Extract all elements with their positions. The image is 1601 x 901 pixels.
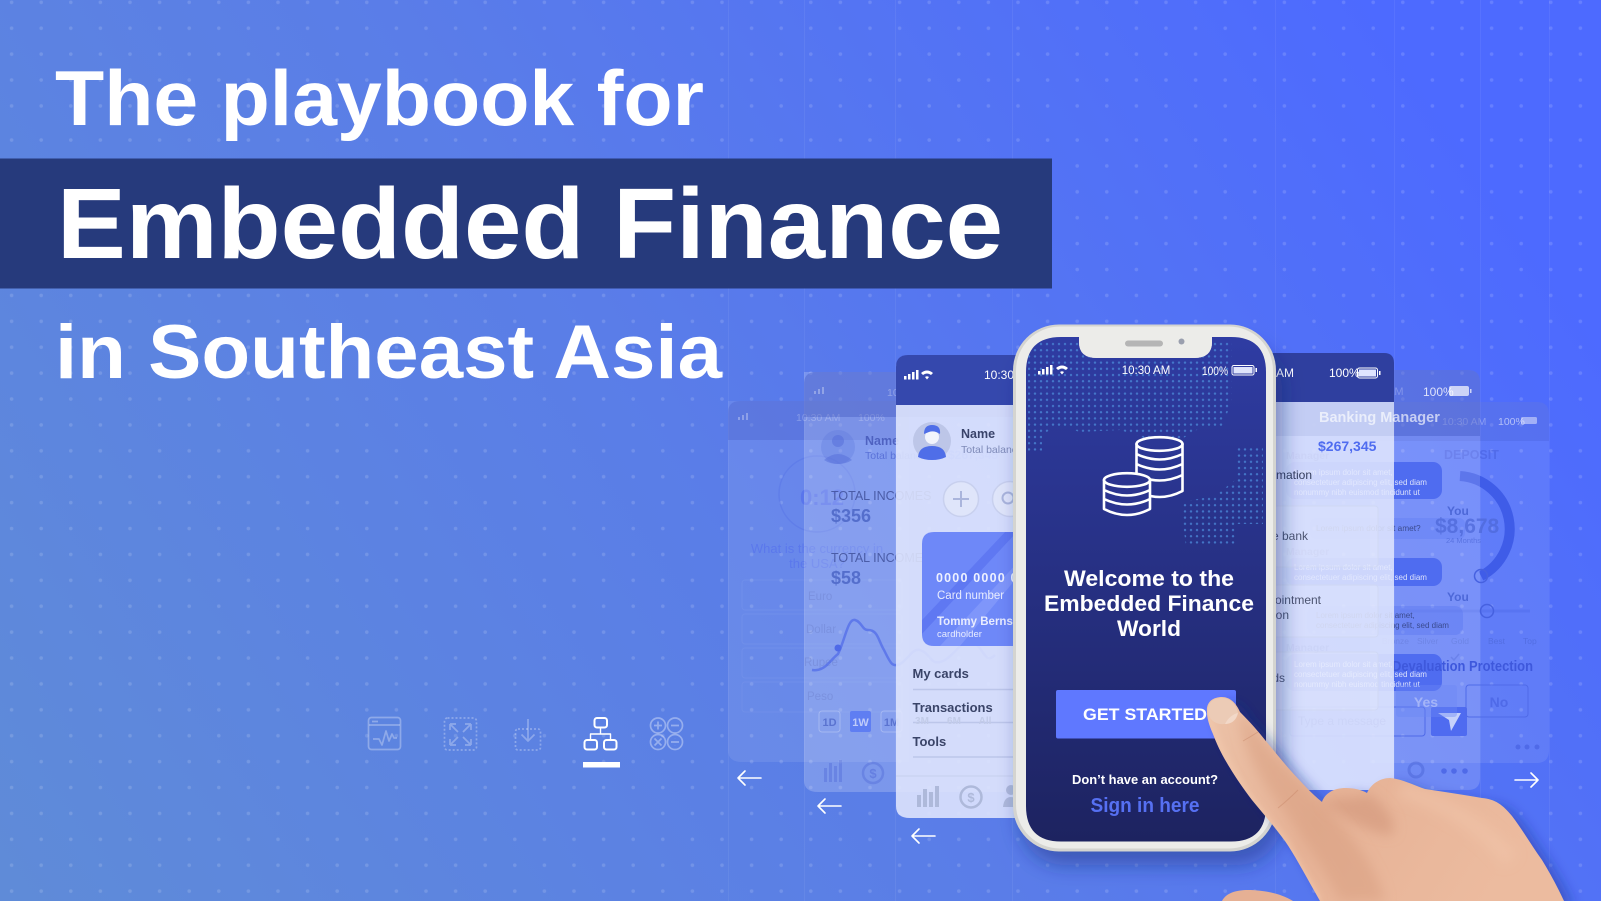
bank card: cardholder bbox=[937, 629, 982, 640]
icon row bbox=[368, 718, 682, 768]
phone status bar: 10:30 AM bbox=[1122, 365, 1170, 377]
chat messages: consectetuer adipiscing elit, sed diam bbox=[1294, 670, 1427, 679]
ghost screen: incomes left: 1D bbox=[822, 717, 837, 729]
bank card: Tommy Berns bbox=[937, 616, 1013, 628]
arrow: forward bbox=[1515, 773, 1538, 787]
deposit indicators bbox=[1474, 570, 1494, 618]
ghost screen: deposit far right bbox=[1370, 402, 1549, 763]
phone status bar: 100% bbox=[1202, 366, 1228, 378]
ghost screen: chat middle right bbox=[1270, 370, 1533, 790]
deposit figures: You bbox=[1447, 504, 1469, 518]
app screen: banking manager bbox=[1270, 353, 1440, 790]
title line: The playbook for: The playbook for bbox=[55, 54, 704, 142]
app screen: cards and balance: Name bbox=[961, 427, 995, 441]
phone bbox=[1013, 324, 1282, 865]
deposit figures bbox=[1435, 504, 1500, 604]
app screen: banking manager: $267,345 bbox=[1318, 438, 1377, 454]
arrow: back far left bbox=[738, 771, 761, 785]
chat messages: Manager bbox=[1286, 546, 1329, 558]
app screen: banking manager: ointment bbox=[1275, 593, 1322, 607]
app screen: banking manager: mation bbox=[1276, 468, 1312, 482]
chat messages: consectetuer adipiscing elit, sed diam bbox=[1316, 621, 1449, 630]
ghost screen: incomes left: $267,345 bbox=[948, 448, 998, 462]
ghost screen: quiz far left: Euro bbox=[808, 591, 832, 603]
chat messages: Lorem ipsum dolor sit amet, bbox=[1316, 611, 1415, 620]
chat messages: Manager bbox=[1286, 642, 1329, 654]
ghost screen: deposit far right: 100% bbox=[1498, 416, 1525, 428]
devaluation protection: No bbox=[1490, 694, 1508, 710]
icon: browser activity bbox=[368, 718, 400, 750]
sign-in prompt bbox=[1072, 773, 1218, 817]
ghost screen: incomes left: Name bbox=[865, 434, 899, 448]
app screen: banking manager: Banking Manager bbox=[1319, 410, 1440, 426]
phone status bar bbox=[1038, 365, 1257, 378]
ghost screen: quiz far left: What is the currency in bbox=[751, 541, 883, 556]
get started button: GET STARTED bbox=[1083, 705, 1207, 724]
ghost screen: incomes left: $58 bbox=[831, 568, 861, 588]
ghost screen: incomes left: TOTAL INCOMES bbox=[831, 551, 931, 565]
icon: coin stacks bbox=[1104, 437, 1182, 515]
ghost screen: deposit far right: Top bbox=[1523, 636, 1537, 646]
app screen: cards and balance: All bbox=[979, 716, 992, 727]
menu list: Tools bbox=[912, 734, 946, 749]
phone screen bbox=[1026, 337, 1266, 842]
ghost screen: quiz far left: the USA? bbox=[789, 556, 845, 571]
ghost screen: incomes left: 1M bbox=[884, 717, 899, 729]
ghost screen: deposit far right: Bronze bbox=[1382, 636, 1409, 646]
ghost screen: incomes left bbox=[804, 372, 1020, 792]
chat messages: consectetuer adipiscing elit, sed diam bbox=[1294, 573, 1427, 582]
devaluation protection: Devaluation Protection bbox=[1392, 658, 1533, 675]
devaluation protection: Yes bbox=[1414, 694, 1438, 710]
ghost screen: incomes left: $356 bbox=[831, 506, 871, 526]
devaluation protection bbox=[1392, 658, 1533, 717]
ghost screen: quiz far left: 10:30 AM bbox=[796, 412, 840, 424]
menu list: My cards bbox=[912, 666, 969, 681]
ghost screen: deposit far right: 10:30 AM bbox=[1442, 416, 1486, 428]
chat messages: consectetuer adipiscing elit, sed diam bbox=[1294, 478, 1427, 487]
app screen: cards and balance: 6M bbox=[947, 716, 961, 727]
ghost screen: quiz far left: Dollar bbox=[806, 624, 836, 636]
icon: download bbox=[516, 719, 540, 750]
navigation arrows bbox=[738, 771, 1538, 843]
status bar bbox=[904, 370, 933, 380]
title line: in Southeast Asia: in Southeast Asia bbox=[55, 310, 723, 395]
hand pointing at the button bbox=[1207, 697, 1574, 901]
fingernail bbox=[1208, 698, 1238, 724]
action buttons bbox=[944, 482, 1028, 516]
app screen: banking manager: 100% bbox=[1329, 366, 1360, 380]
menu list: Transactions bbox=[912, 700, 993, 715]
app screen: banking manager: on bbox=[1276, 608, 1289, 622]
app screen: cards and balance: 3M bbox=[915, 716, 929, 727]
thumb tip bbox=[1222, 890, 1293, 901]
ghost screen: incomes left: Total balance bbox=[865, 450, 927, 462]
chat messages: Lorem ipsum dolor sit amet? bbox=[1316, 523, 1421, 533]
bank card: Card number bbox=[937, 590, 1004, 602]
icon: expand bbox=[444, 718, 476, 750]
sign-in prompt: Sign in here bbox=[1090, 795, 1200, 817]
chat messages: nonummy nibh euismod tincidunt ut bbox=[1294, 680, 1421, 689]
footer icons bbox=[896, 775, 1020, 808]
welcome heading: World bbox=[1117, 616, 1181, 641]
ghost screen: deposit far right: Best bbox=[1488, 636, 1506, 646]
app screen: banking manager: ds bbox=[1272, 671, 1285, 685]
arrow: back middle bbox=[818, 799, 841, 813]
app screen: cards and balance: 10:30 bbox=[984, 368, 1014, 382]
ghost screen: quiz far left bbox=[728, 401, 909, 762]
deposit figures: 24 Months bbox=[1446, 536, 1481, 545]
ghost screen: quiz far left: 0:12 bbox=[800, 485, 844, 510]
chat messages: Type a message bbox=[1298, 714, 1386, 728]
deposit figures: You bbox=[1447, 590, 1469, 604]
chat messages: Lorem ipsum dolor sit amet, bbox=[1294, 468, 1393, 477]
arrow: back near bbox=[912, 829, 935, 843]
ghost screen: chat middle right: 100% bbox=[1423, 385, 1454, 399]
app screen: banking manager: AM bbox=[1276, 366, 1294, 380]
ghost screen: quiz far left: Rupee bbox=[804, 657, 838, 669]
ghost screen: deposit far right: Gold bbox=[1451, 636, 1469, 646]
ghost screen: incomes left: 100% bbox=[953, 387, 980, 399]
menu list bbox=[912, 666, 1020, 757]
chat messages: Lorem ipsum dolor sit amet, bbox=[1294, 660, 1393, 669]
footer icons: $ bbox=[967, 790, 975, 805]
get started button bbox=[1056, 690, 1236, 738]
ghost screen: deposit far right: DEPOSIT bbox=[1444, 448, 1499, 462]
speaker and camera bbox=[1125, 338, 1184, 346]
icon: calculator operations bbox=[650, 718, 682, 750]
icon: org chart active bbox=[584, 718, 616, 750]
app screen: cards and balance bbox=[896, 355, 1043, 818]
ghost screen: chat middle right: 10:30 AM bbox=[1357, 386, 1403, 398]
world map dots bbox=[1028, 340, 1263, 546]
deposit figures: $8,678 bbox=[1435, 515, 1500, 538]
ghost screen: deposit far right: Silver bbox=[1417, 636, 1438, 646]
bank card: 0000 0000 0000 bbox=[936, 571, 1043, 585]
ghost screen: incomes left: TOTAL INCOMES bbox=[831, 489, 931, 503]
sign-in prompt: Don’t have an account? bbox=[1072, 773, 1218, 787]
chat messages: Lorem ipsum dolor sit amet, bbox=[1294, 563, 1393, 572]
welcome heading: Welcome to the bbox=[1064, 566, 1234, 591]
title band: Embedded Finance: Embedded Finance bbox=[57, 168, 1003, 280]
bank card bbox=[922, 532, 1043, 646]
welcome heading: Embedded Finance bbox=[1044, 591, 1254, 616]
ghost screen: incomes left: 1W bbox=[852, 717, 869, 729]
ghost screen: incomes left: $ bbox=[869, 766, 877, 781]
ghost screen: incomes left: 10:30 AM bbox=[887, 387, 931, 399]
chat messages bbox=[1286, 450, 1465, 736]
profile avatar bbox=[913, 422, 951, 460]
app screen: cards and balance: Total balance bbox=[961, 444, 1023, 456]
app screen: banking manager: e bank bbox=[1272, 529, 1309, 543]
chat messages: nonummy nibh euismod tincidunt ut bbox=[1294, 488, 1421, 497]
chat messages: Manager bbox=[1286, 450, 1329, 462]
ghost screen: quiz far left: 100% bbox=[858, 412, 885, 424]
welcome heading bbox=[1044, 566, 1254, 641]
active indicator bbox=[583, 762, 620, 768]
ghost screen: quiz far left: Peso bbox=[807, 691, 833, 703]
